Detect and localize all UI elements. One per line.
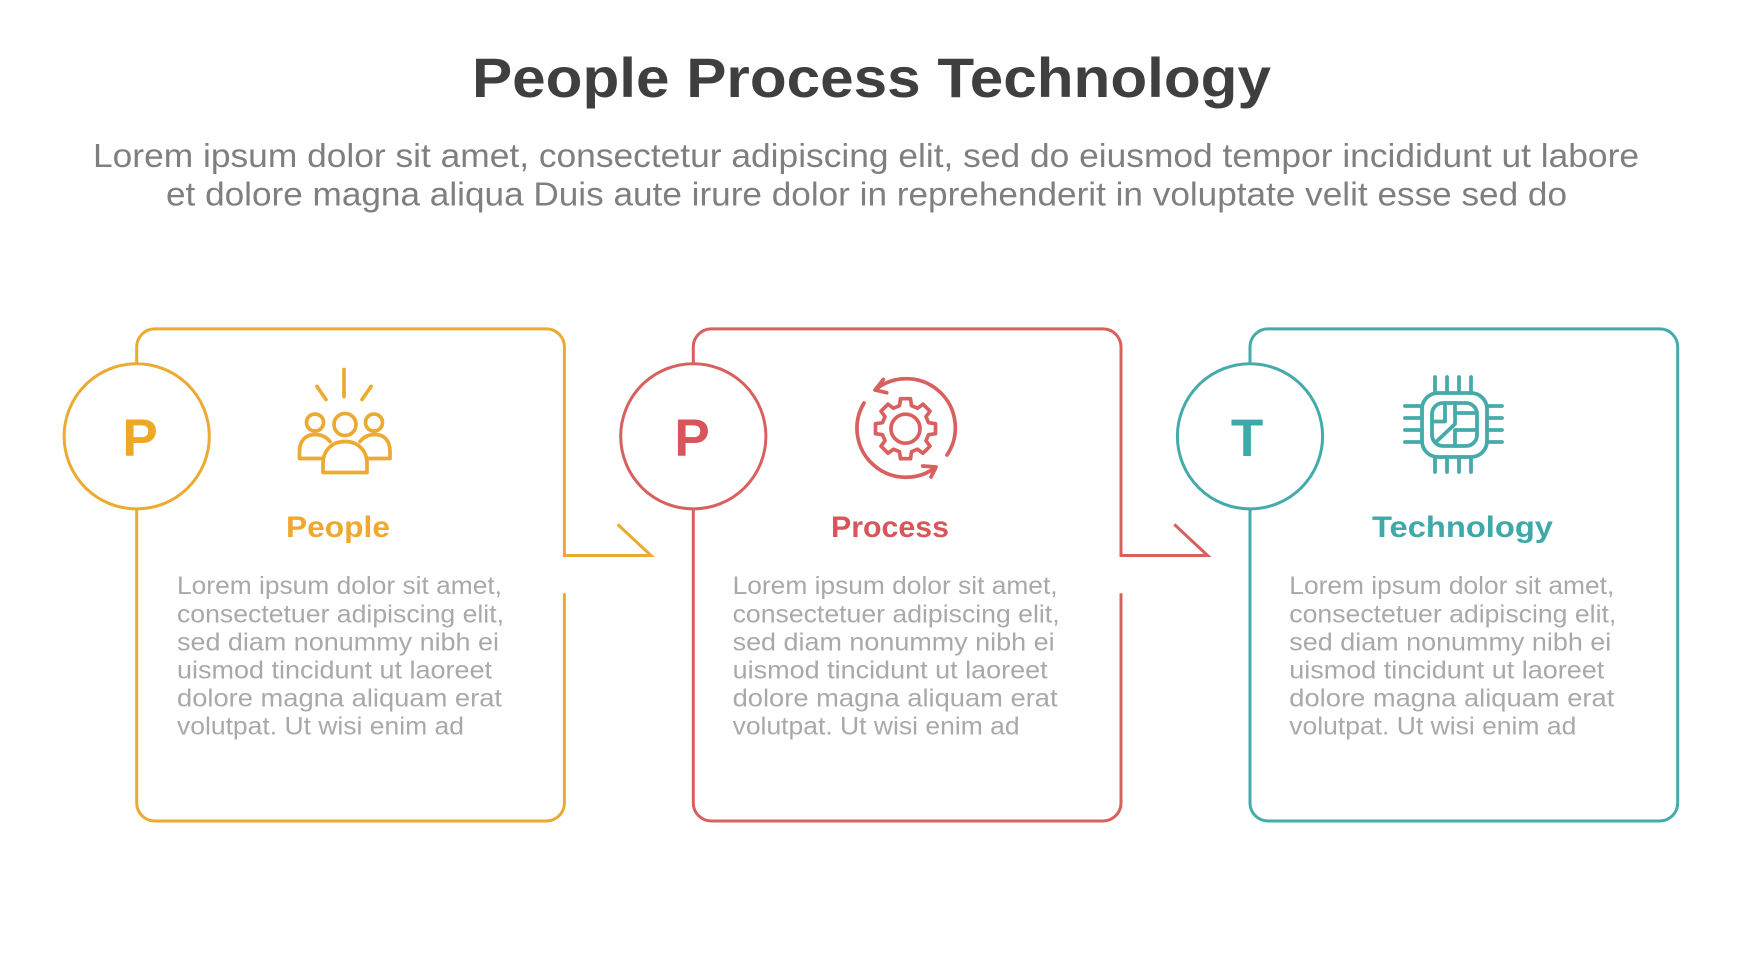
panel: process <box>621 329 1208 821</box>
process heading: Process <box>831 511 949 544</box>
people letter circle <box>64 364 209 509</box>
process body text: Lorem ipsum dolor sit amet, <box>733 572 1058 600</box>
technology body text: consectetuer adipiscing elit, <box>1289 600 1616 628</box>
title: People Process Technology <box>472 46 1271 109</box>
panel: people <box>64 329 651 821</box>
subtitle text: Lorem ipsum dolor sit amet, consectetur adipiscing elit, sed do eiusmod tempor incididunt ut labore <box>93 137 1639 174</box>
process body text: uismod tincidunt ut laoreet <box>733 656 1048 684</box>
subtitle text <box>93 137 1639 212</box>
technology body text: volutpat. Ut wisi enim ad <box>1289 712 1576 740</box>
people body text: dolore magna aliquam erat <box>177 684 502 712</box>
process body text: volutpat. Ut wisi enim ad <box>733 712 1020 740</box>
technology heading: Technology <box>1372 511 1553 544</box>
people letter: P <box>122 409 158 468</box>
people body text: uismod tincidunt ut laoreet <box>177 656 492 684</box>
icon: microchip <box>1405 377 1502 472</box>
process body text: consectetuer adipiscing elit, <box>733 600 1060 628</box>
technology body text: Lorem ipsum dolor sit amet, <box>1289 572 1614 600</box>
process letter: P <box>674 409 710 468</box>
technology body text: dolore magna aliquam erat <box>1289 684 1614 712</box>
process card outline with arrow <box>693 329 1208 821</box>
people body text: sed diam nonummy nibh ei <box>177 628 499 656</box>
technology letter: T <box>1231 409 1263 468</box>
technology body text: uismod tincidunt ut laoreet <box>1289 656 1604 684</box>
technology letter circle <box>1177 364 1323 509</box>
technology body text: sed diam nonummy nibh ei <box>1289 628 1611 656</box>
panel: technology <box>1177 329 1678 821</box>
process body text: sed diam nonummy nibh ei <box>733 628 1055 656</box>
people body text: consectetuer adipiscing elit, <box>177 600 504 628</box>
people body text: Lorem ipsum dolor sit amet, <box>177 572 502 600</box>
people body text <box>177 572 504 740</box>
process body text: dolore magna aliquam erat <box>733 684 1058 712</box>
people heading: People <box>286 511 390 544</box>
icon: gear with cycle arrows <box>857 379 955 477</box>
process letter circle <box>621 364 766 509</box>
people card outline with arrow <box>137 329 651 821</box>
process body text <box>733 572 1060 740</box>
subtitle text: et dolore magna aliqua Duis aute irure dolor in reprehenderit in voluptate velit esse sed do <box>166 176 1567 212</box>
technology card outline <box>1250 329 1678 821</box>
technology body text <box>1289 572 1616 740</box>
icon: people group <box>300 370 390 472</box>
people body text: volutpat. Ut wisi enim ad <box>177 712 464 740</box>
